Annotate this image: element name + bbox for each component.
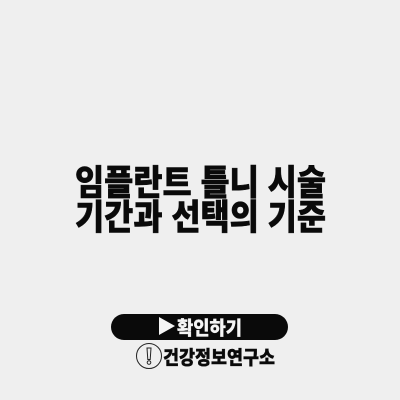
button label: 확인하기 (177, 318, 242, 340)
title line 1: 임플란트 틀니 시술 (75, 164, 326, 203)
icon: exclamation circle (136, 344, 162, 368)
icon: play triangle (159, 317, 175, 335)
brand name: 건강정보연구소 (163, 347, 275, 369)
title line 2: 기간과 선택의 기준 (75, 198, 326, 238)
button background (111, 314, 288, 340)
title (75, 164, 326, 238)
brand: health information institute (136, 344, 275, 369)
button: confirm (111, 314, 288, 340)
